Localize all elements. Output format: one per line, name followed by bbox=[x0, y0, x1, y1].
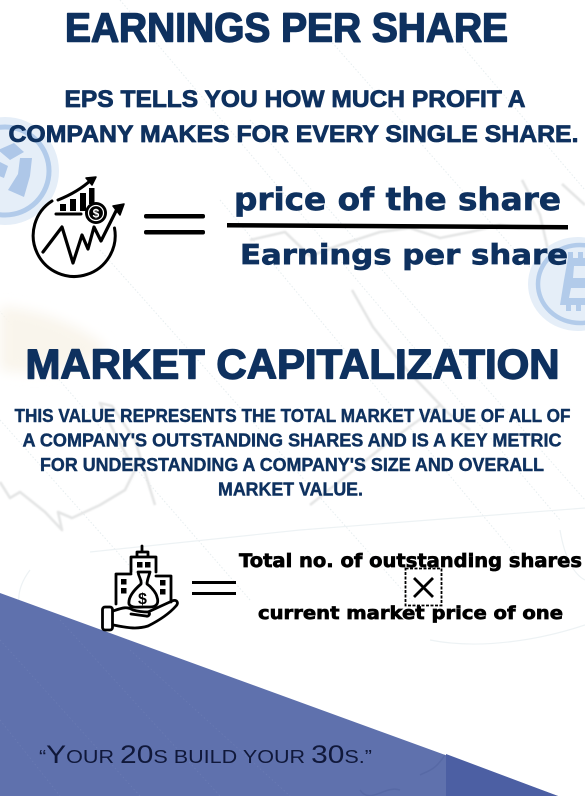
quote: “YOUR 20 S BUILD YOUR 30 S.” bbox=[39, 741, 372, 769]
subtitle: eps definition: EPS TELLS YOU HOW MUCH PROFIT A bbox=[64, 86, 526, 113]
paragraph: market cap definition bbox=[14, 405, 570, 500]
blue triangle bbox=[0, 593, 558, 796]
icon: hand holding money bag and buildings: $ bbox=[138, 591, 147, 608]
formula: market cap: current market price of one bbox=[258, 603, 563, 624]
fraction: price over earnings: Earnings per share bbox=[240, 238, 568, 271]
coin right bbox=[528, 237, 585, 331]
icon: growth chart with dollar coin bbox=[33, 177, 124, 276]
paragraph: market cap definition: MARKET VALUE. bbox=[218, 478, 363, 500]
coin left bbox=[0, 117, 59, 225]
fraction: price over earnings bbox=[227, 182, 568, 271]
equals sign: eps bbox=[144, 214, 205, 234]
equals sign: market cap bbox=[192, 581, 236, 595]
formula: market cap bbox=[239, 550, 582, 624]
multiply box bbox=[406, 568, 442, 606]
fraction: price over earnings: price of the share bbox=[234, 182, 561, 218]
formula: market cap: Total no. of outstanding shares bbox=[239, 550, 582, 572]
title: earnings per share: EARNINGS PER SHARE bbox=[65, 4, 508, 50]
icon: hand holding money bag and buildings bbox=[102, 546, 177, 630]
paragraph: market cap definition: FOR UNDERSTANDING A COMPANY'S SIZE AND OVERALL bbox=[40, 454, 544, 475]
subtitle: eps definition bbox=[8, 86, 578, 148]
icon: growth chart with dollar coin: $ bbox=[93, 206, 100, 220]
paragraph: market cap definition: A COMPANY'S OUTSTANDING SHARES AND IS A KEY METRIC bbox=[22, 430, 562, 450]
heading: market capitalization: MARKET CAPITALIZATION bbox=[26, 340, 560, 388]
subtitle: eps definition: COMPANY MAKES FOR EVERY SINGLE SHARE. bbox=[8, 121, 578, 148]
